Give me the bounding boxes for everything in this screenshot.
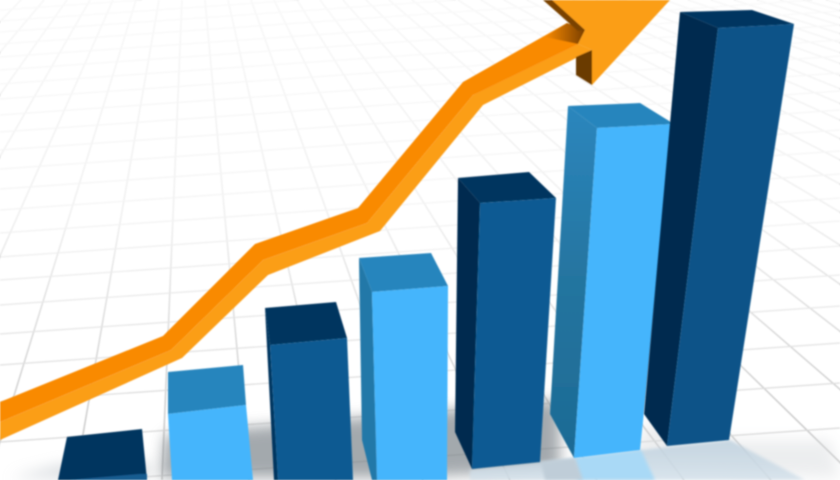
arrow shaft: upper band (0, 23, 585, 422)
bar 7 (644, 10, 794, 446)
arrow head notch edge (543, 0, 585, 31)
arrow head underside (576, 50, 592, 85)
bar 1 (58, 429, 147, 480)
bar 4 (359, 253, 448, 480)
arrow shaft: lower band (0, 44, 592, 440)
rising arrow (0, 0, 670, 440)
arrow head inner shadow (545, 23, 585, 44)
bar 5 (455, 172, 556, 469)
bar 2 (168, 365, 253, 480)
bar 3 (265, 302, 353, 480)
floor shadows and reflections (10, 400, 840, 480)
bar 6 (550, 103, 674, 458)
arrow head (547, 0, 670, 85)
